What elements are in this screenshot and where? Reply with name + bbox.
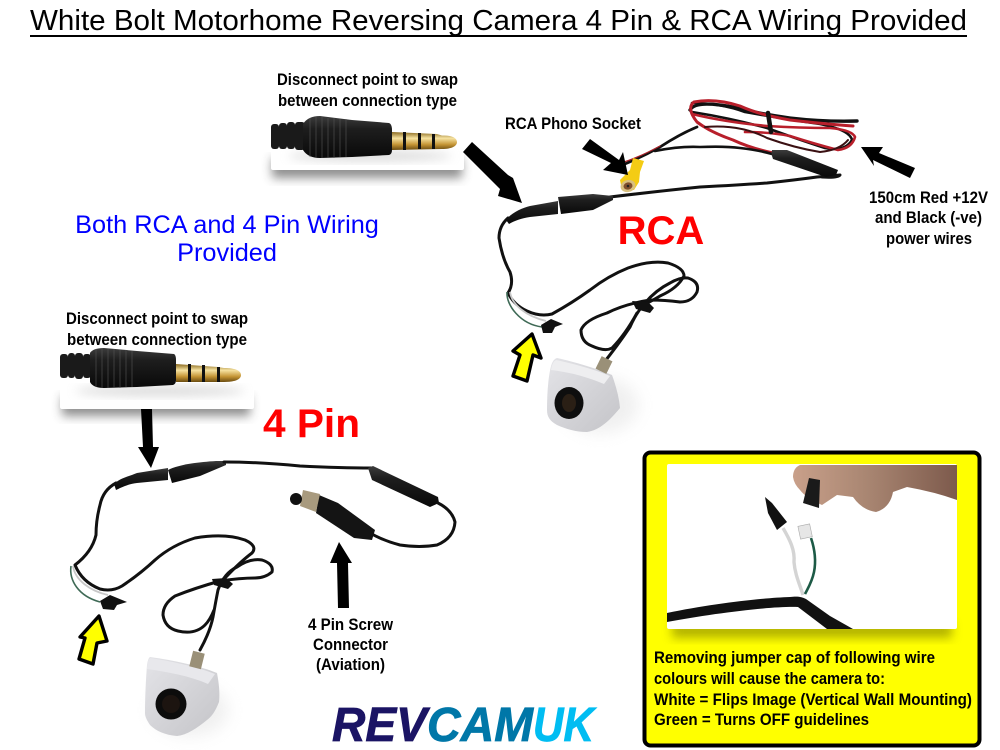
cable: camera to connector	[75, 483, 254, 590]
heading: 4 Pin: 4 Pin	[263, 402, 360, 446]
label: power wires: 150cm Red +12V	[869, 188, 989, 207]
instructions text	[654, 648, 972, 729]
instructions text: colours will cause the camera to:	[654, 669, 885, 688]
label: aviation connector: Connector	[313, 635, 388, 654]
arrow: yellow 4 pin jumper	[79, 616, 107, 664]
jack ridges	[96, 348, 132, 388]
coiled cable	[60, 353, 91, 379]
camera	[145, 651, 219, 736]
main cable to control box	[610, 175, 840, 197]
label: RCA Phono Socket: RCA Phono Socket	[505, 114, 641, 133]
inline connector	[506, 194, 613, 224]
arrow: yellow RCA jumper	[513, 334, 541, 381]
jumper cap	[100, 595, 127, 610]
camera	[547, 356, 620, 432]
note: both wiring types provided: Provided	[177, 239, 277, 267]
body shadow	[288, 151, 452, 161]
instructions text: Green = Turns OFF guidelines	[654, 710, 869, 729]
cable: camera loop	[581, 278, 698, 365]
arrow: jack to 4 pin connector	[138, 409, 159, 468]
photo shadow	[672, 622, 952, 638]
cable	[667, 597, 853, 629]
photo background	[271, 110, 464, 170]
label: bottom between connection type: between connection type	[67, 330, 247, 349]
instructions text: Removing jumper cap of following wire	[654, 648, 935, 667]
label: bottom disconnect point: Disconnect point to swap	[66, 309, 248, 328]
cable to control box	[224, 462, 372, 468]
cable tie	[212, 578, 233, 589]
label: power wires: power wires	[886, 229, 972, 248]
panel: jack photo top	[271, 110, 464, 178]
jack tip	[392, 132, 457, 150]
body shadow	[75, 386, 245, 396]
held jumper	[803, 478, 820, 508]
jack ridges	[310, 117, 346, 158]
arrow: jack to RCA connector	[463, 142, 522, 203]
photo background	[60, 350, 254, 409]
white connector	[798, 524, 812, 539]
arrow: aviation connector	[330, 542, 352, 608]
cable tie	[632, 301, 654, 313]
power wires coil	[620, 101, 857, 166]
white and green wires	[507, 292, 546, 327]
panel: 4 Pin wiring photo	[71, 461, 455, 736]
label: power wires: and Black (-ve)	[875, 208, 982, 227]
green wire	[805, 538, 815, 594]
jumper cap	[541, 319, 563, 333]
jack body	[303, 116, 392, 158]
note: both wiring types provided: Both RCA and 4 Pin Wiring	[75, 211, 379, 239]
label: aviation connector	[308, 615, 394, 674]
control box	[368, 466, 439, 507]
title: White Bolt Motorhome Reversing Camera 4 Pin & RCA Wiring Provided	[30, 5, 967, 37]
cable: camera loop	[163, 560, 272, 650]
panel: RCA wiring photo	[499, 101, 857, 433]
camera shadow	[562, 377, 638, 433]
coiled cable	[271, 122, 305, 150]
control box	[772, 150, 838, 177]
label: power wires	[869, 188, 989, 248]
inline connector	[114, 461, 226, 490]
label: top between connection type: between connection type	[278, 91, 457, 110]
jumper photo	[667, 464, 957, 629]
jack body	[90, 348, 176, 388]
label: top disconnect point: Disconnect point to swap	[277, 70, 458, 89]
cable to aviation connector	[370, 503, 455, 546]
aviation connector	[290, 490, 375, 540]
hand	[793, 465, 957, 512]
panel: jack photo bottom	[60, 348, 254, 416]
camera shadow	[152, 684, 228, 736]
logo: RevCam UK	[332, 699, 597, 750]
panel: jumper cap instructions	[644, 452, 980, 746]
label: aviation connector: 4 Pin Screw	[308, 615, 394, 634]
white wire	[783, 528, 803, 595]
instructions text: White = Flips Image (Vertical Wall Mounting)	[654, 690, 972, 709]
RCA yellow socket	[619, 158, 644, 194]
photo shadow	[272, 158, 462, 178]
white and green wires	[71, 566, 108, 602]
arrow: RCA phono socket	[582, 139, 628, 175]
panel background	[644, 452, 980, 746]
jack tip	[176, 364, 241, 382]
heading: RCA: RCA	[618, 209, 704, 253]
loose jumper	[765, 497, 787, 530]
arrow: power wires	[861, 147, 915, 178]
photo shadow	[62, 396, 250, 416]
cable: camera to connector	[499, 218, 684, 315]
label: aviation connector: (Aviation)	[316, 655, 385, 674]
